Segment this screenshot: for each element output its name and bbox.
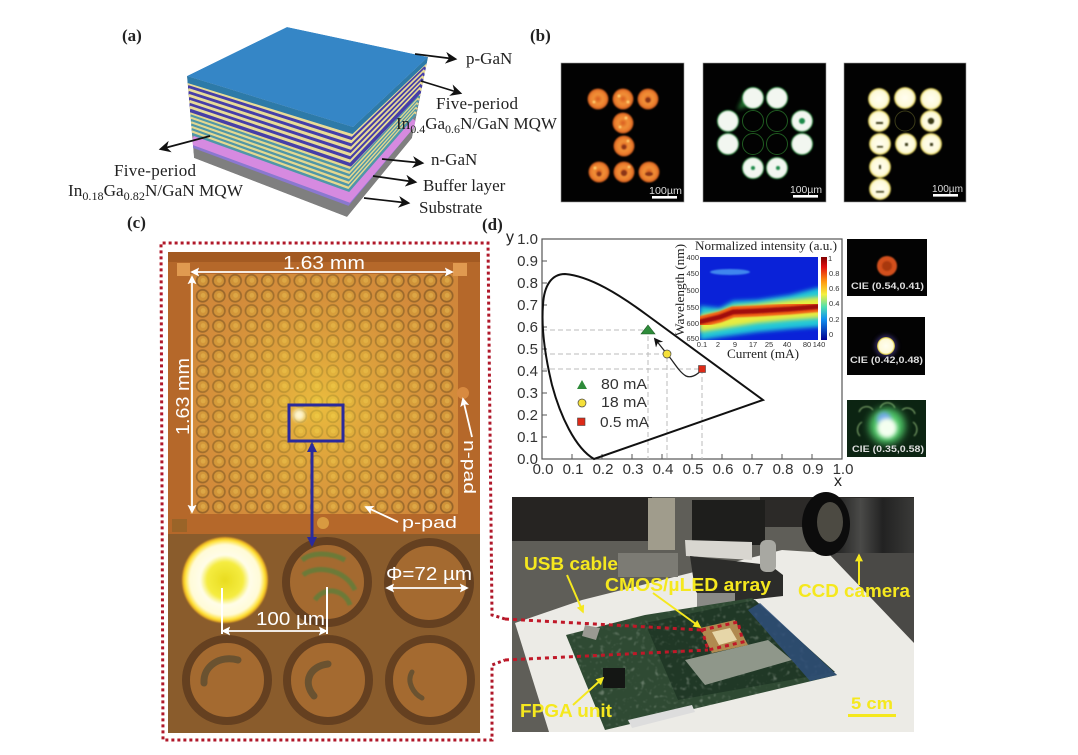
x axis labels: 0.3 [623, 461, 643, 478]
dotted callout frame [161, 243, 505, 740]
y axis labels: 0.7 [517, 297, 538, 314]
layer stack 3D block [187, 27, 428, 217]
label: CCD camera [798, 555, 911, 601]
inset tick labels: 0.2 [829, 315, 839, 324]
label: upper quantum wells: 0.6 [445, 122, 460, 136]
micrograph: green letter O: 100µm [790, 184, 822, 196]
colour shift path [655, 339, 702, 377]
axis name x: x [834, 473, 842, 490]
inset tick labels: 0.1 [697, 340, 707, 349]
y axis labels: 1.0 [517, 231, 538, 248]
dimension: diameter 72 µm: Φ=72 µm [386, 564, 472, 584]
axis ticks [542, 261, 812, 459]
inset tick labels: 0.4 [829, 299, 839, 308]
micrograph: zoomed pixels [168, 534, 480, 733]
y axis labels: 0.6 [517, 319, 538, 336]
label: upper quantum wells: 0.4 [410, 122, 425, 136]
dimension: pitch 100 µm: 100 µm [256, 609, 325, 629]
inset tick labels: 17 [749, 340, 757, 349]
inset tick labels: 650 [686, 334, 699, 343]
inset tick labels: 0.8 [829, 269, 839, 278]
label: p-pad: p-pad [402, 513, 457, 532]
x axis labels: 0.9 [803, 461, 823, 478]
inset tick labels: 40 [783, 340, 791, 349]
label: p-GaN: p-GaN [466, 49, 512, 68]
axis name y: y [506, 229, 514, 246]
panel (b): letter emission micrographs [530, 26, 966, 202]
image: CIE 0.42,0.48 [847, 317, 925, 375]
y axis labels: 0.1 [517, 429, 538, 446]
apparatus: CCD camera lens [802, 492, 914, 556]
marker: 18 mA [663, 350, 671, 358]
label: n-GaN: n-GaN [431, 150, 477, 169]
arrows: layer leaders [161, 54, 460, 203]
x axis labels: 0.7 [743, 461, 763, 478]
micrograph: full array [168, 252, 480, 534]
dimension: array width: 1.63 mm [283, 253, 365, 273]
panel (a): layered stack diagram [68, 26, 558, 217]
inset x axis title: Current (mA) [727, 347, 799, 361]
image: CIE 0.54,0.41: CIE (0.54,0.41) [851, 281, 924, 291]
label: upper quantum wells: Ga [425, 114, 446, 133]
legend: 80 mA [601, 376, 647, 393]
marker: 80 mA [641, 325, 655, 334]
x axis labels: 0.4 [653, 461, 673, 478]
y axis labels: 0.4 [517, 363, 538, 380]
inset tick labels: 600 [686, 319, 699, 328]
image: CIE 0.35,0.58 [847, 400, 926, 457]
y axis labels: 0.0 [517, 451, 538, 468]
circuit boards [560, 595, 840, 735]
image: CIE 0.54,0.41 [847, 239, 927, 296]
label: upper quantum wells: In [396, 114, 410, 133]
label: CMOS/µLED array [605, 575, 771, 627]
scale bar: 5 cm [848, 694, 896, 717]
x axis labels: 0.8 [773, 461, 793, 478]
inset tick labels: 80 [803, 340, 811, 349]
label: p-pad [366, 507, 457, 532]
photo backdrop and paper [512, 497, 914, 732]
inset tick labels: 0 [829, 330, 833, 339]
panel (c): micro-LED array microscopy [127, 213, 505, 740]
label: lower quantum wells: In [68, 181, 82, 200]
label: upper quantum wells [396, 94, 558, 136]
y axis labels [517, 231, 538, 468]
x axis labels: 0.5 [683, 461, 703, 478]
label: lower quantum wells: 0.82 [124, 189, 145, 203]
inset tick labels: 550 [686, 303, 699, 312]
label: CCD camera: CCD camera [798, 581, 911, 601]
inset tick labels: 450 [686, 269, 699, 278]
label: lower quantum wells: 0.18 [82, 189, 104, 203]
y axis labels: 0.8 [517, 275, 538, 292]
panel (d): CIE chromaticity chart [482, 215, 927, 490]
label: lower quantum wells: N/GaN MQW [145, 181, 244, 200]
legend [577, 376, 649, 431]
label: lower quantum wells: Ga [104, 181, 124, 200]
marker: 0.5 mA [698, 366, 706, 372]
label: upper quantum wells: N/GaN MQW [460, 114, 558, 133]
micrograph: red letter I [561, 63, 684, 202]
dimension: array height: 1.63 mm [173, 358, 193, 435]
label: Substrate: Substrate [419, 198, 482, 217]
apparatus: stage and column [618, 498, 783, 618]
label: Buffer layer: Buffer layer [423, 176, 506, 195]
x axis labels: 0.1 [563, 461, 583, 478]
selection box and zoom arrow [289, 405, 343, 545]
inset heat map [695, 257, 827, 340]
x axis labels: 0.2 [593, 461, 613, 478]
y axis labels: 0.3 [517, 385, 538, 402]
heading: panel c: (c) [127, 213, 146, 232]
y axis labels: 0.2 [517, 407, 538, 424]
label: FPGA unit: FPGA unit [520, 701, 612, 721]
legend: 18 mA [601, 394, 647, 411]
label: n-pad: n-pad [460, 440, 479, 494]
inset tick labels: 140 [813, 340, 825, 349]
inset tick labels: 2 [716, 340, 720, 349]
dotted link lines and target box [505, 619, 743, 660]
heading: panel d: (d) [482, 215, 503, 234]
x axis labels: 0.6 [713, 461, 733, 478]
x axis labels: 1.0 [833, 461, 853, 478]
inset tick labels: 500 [686, 286, 699, 295]
label: upper quantum wells: Five-period [436, 94, 518, 113]
image: CIE 0.35,0.58: CIE (0.35,0.58) [852, 444, 924, 454]
inset tick labels [686, 253, 839, 349]
scale bar: 5 cm: 5 cm [851, 694, 893, 713]
image: CIE 0.42,0.48: CIE (0.42,0.48) [850, 355, 923, 365]
label: CMOS/µLED array: CMOS/µLED array [605, 575, 771, 595]
inset tick labels: 1 [828, 254, 832, 263]
label: USB cable [524, 554, 618, 612]
y axis labels: 0.9 [517, 253, 538, 270]
heading: panel b: (b) [530, 26, 551, 45]
x axis labels [533, 461, 853, 478]
dimension: pitch 100 µm [222, 587, 327, 634]
micrograph: red letter I: 100µm [649, 185, 682, 197]
inset y axis title: Wavelength (nm) [673, 244, 687, 336]
CIE gamut curve [543, 274, 763, 459]
label: n-pad [460, 399, 479, 494]
heading: panel a: (a) [122, 26, 142, 45]
photo: experimental setup [505, 492, 914, 735]
inset tick labels: 400 [686, 253, 699, 262]
x axis labels: 0.0 [533, 461, 553, 478]
micrograph: white letter P: 100µm [932, 183, 963, 195]
legend: 0.5 mA [600, 414, 649, 431]
label: USB cable: USB cable [524, 554, 618, 574]
inset title: Normalized intensity (a.u.) [695, 239, 837, 253]
label: FPGA unit [520, 678, 612, 721]
inset tick labels: 25 [765, 340, 773, 349]
micrograph: green letter O [703, 63, 826, 202]
y axis labels: 0.5 [517, 341, 538, 358]
inset tick labels: 0.6 [829, 284, 839, 293]
label: lower quantum wells [68, 161, 244, 203]
inset tick labels: 9 [733, 340, 737, 349]
label: lower quantum wells: Five-period [114, 161, 196, 180]
chart frame [542, 239, 842, 459]
micrograph: white letter P [844, 63, 966, 202]
guide lines [542, 330, 702, 459]
